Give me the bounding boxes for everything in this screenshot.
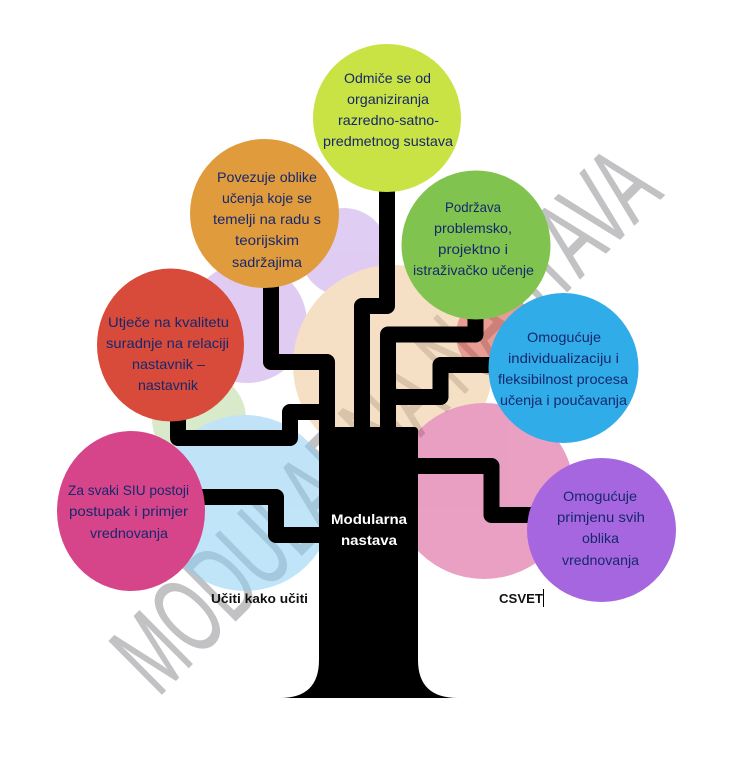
trunk label: nastava xyxy=(341,532,397,548)
bubble: lime: predmetnog sustava xyxy=(323,133,453,149)
bubble: blue: individualizaciju i xyxy=(508,350,619,366)
label: learning to learn: Učiti kako učiti xyxy=(211,591,308,606)
bubble: purple xyxy=(527,458,676,602)
bubble: purple: primjenu svih xyxy=(557,509,645,525)
bubble: orange: temelji na radu s xyxy=(213,211,321,227)
bubble: lime xyxy=(313,44,461,192)
bubble: orange: sadržajima xyxy=(232,254,302,270)
bubble: red: nastavnik xyxy=(138,377,199,393)
tree trunk xyxy=(280,427,458,698)
bubble: magenta: Za svaki SIU postoji xyxy=(68,482,189,498)
label: CSVET: CSVET xyxy=(499,591,543,606)
bubble: lime: razredno-satno- xyxy=(338,112,439,128)
trunk label: Modularna xyxy=(331,511,407,527)
bubble: green: Podržava xyxy=(445,199,501,215)
bubble: red: Utječe na kvalitetu xyxy=(108,314,229,330)
bubble: orange: teorijskim xyxy=(235,232,299,248)
bubble: magenta xyxy=(57,431,205,591)
bubble: blue: učenja i poučavanja xyxy=(500,392,627,408)
bubble: lime: organiziranja xyxy=(347,91,429,107)
bubble: red xyxy=(97,268,244,422)
bubble: blue xyxy=(488,293,638,443)
bubble: purple: vrednovanja xyxy=(562,552,639,568)
bubble: purple: oblika xyxy=(582,530,619,546)
bubble: green: problemsko, xyxy=(434,220,512,236)
bubble: green: projektno i xyxy=(438,241,508,257)
bubble: lime: Odmiče se od xyxy=(344,70,431,86)
bubble: red: suradnje na relaciji xyxy=(106,335,229,351)
bubble: purple: Omogućuje xyxy=(563,488,637,504)
bubble: orange: učenja koje se xyxy=(222,190,312,206)
bubble: blue: fleksibilnost procesa xyxy=(498,371,628,387)
tree branches xyxy=(178,185,532,535)
bubble: magenta: postupak i primjer xyxy=(69,503,188,519)
bubble: orange xyxy=(190,139,339,288)
trunk label xyxy=(331,511,407,548)
bubble: green: istraživačko učenje xyxy=(413,262,534,278)
bubble: orange: Povezuje oblike xyxy=(217,169,317,185)
bubble: green xyxy=(402,170,550,320)
bubble: blue: Omogućuje xyxy=(527,329,601,345)
bubble: magenta: vrednovanja xyxy=(90,525,168,541)
foliage: pale background circles xyxy=(152,208,574,591)
bubble: red: nastavnik – xyxy=(132,356,205,372)
